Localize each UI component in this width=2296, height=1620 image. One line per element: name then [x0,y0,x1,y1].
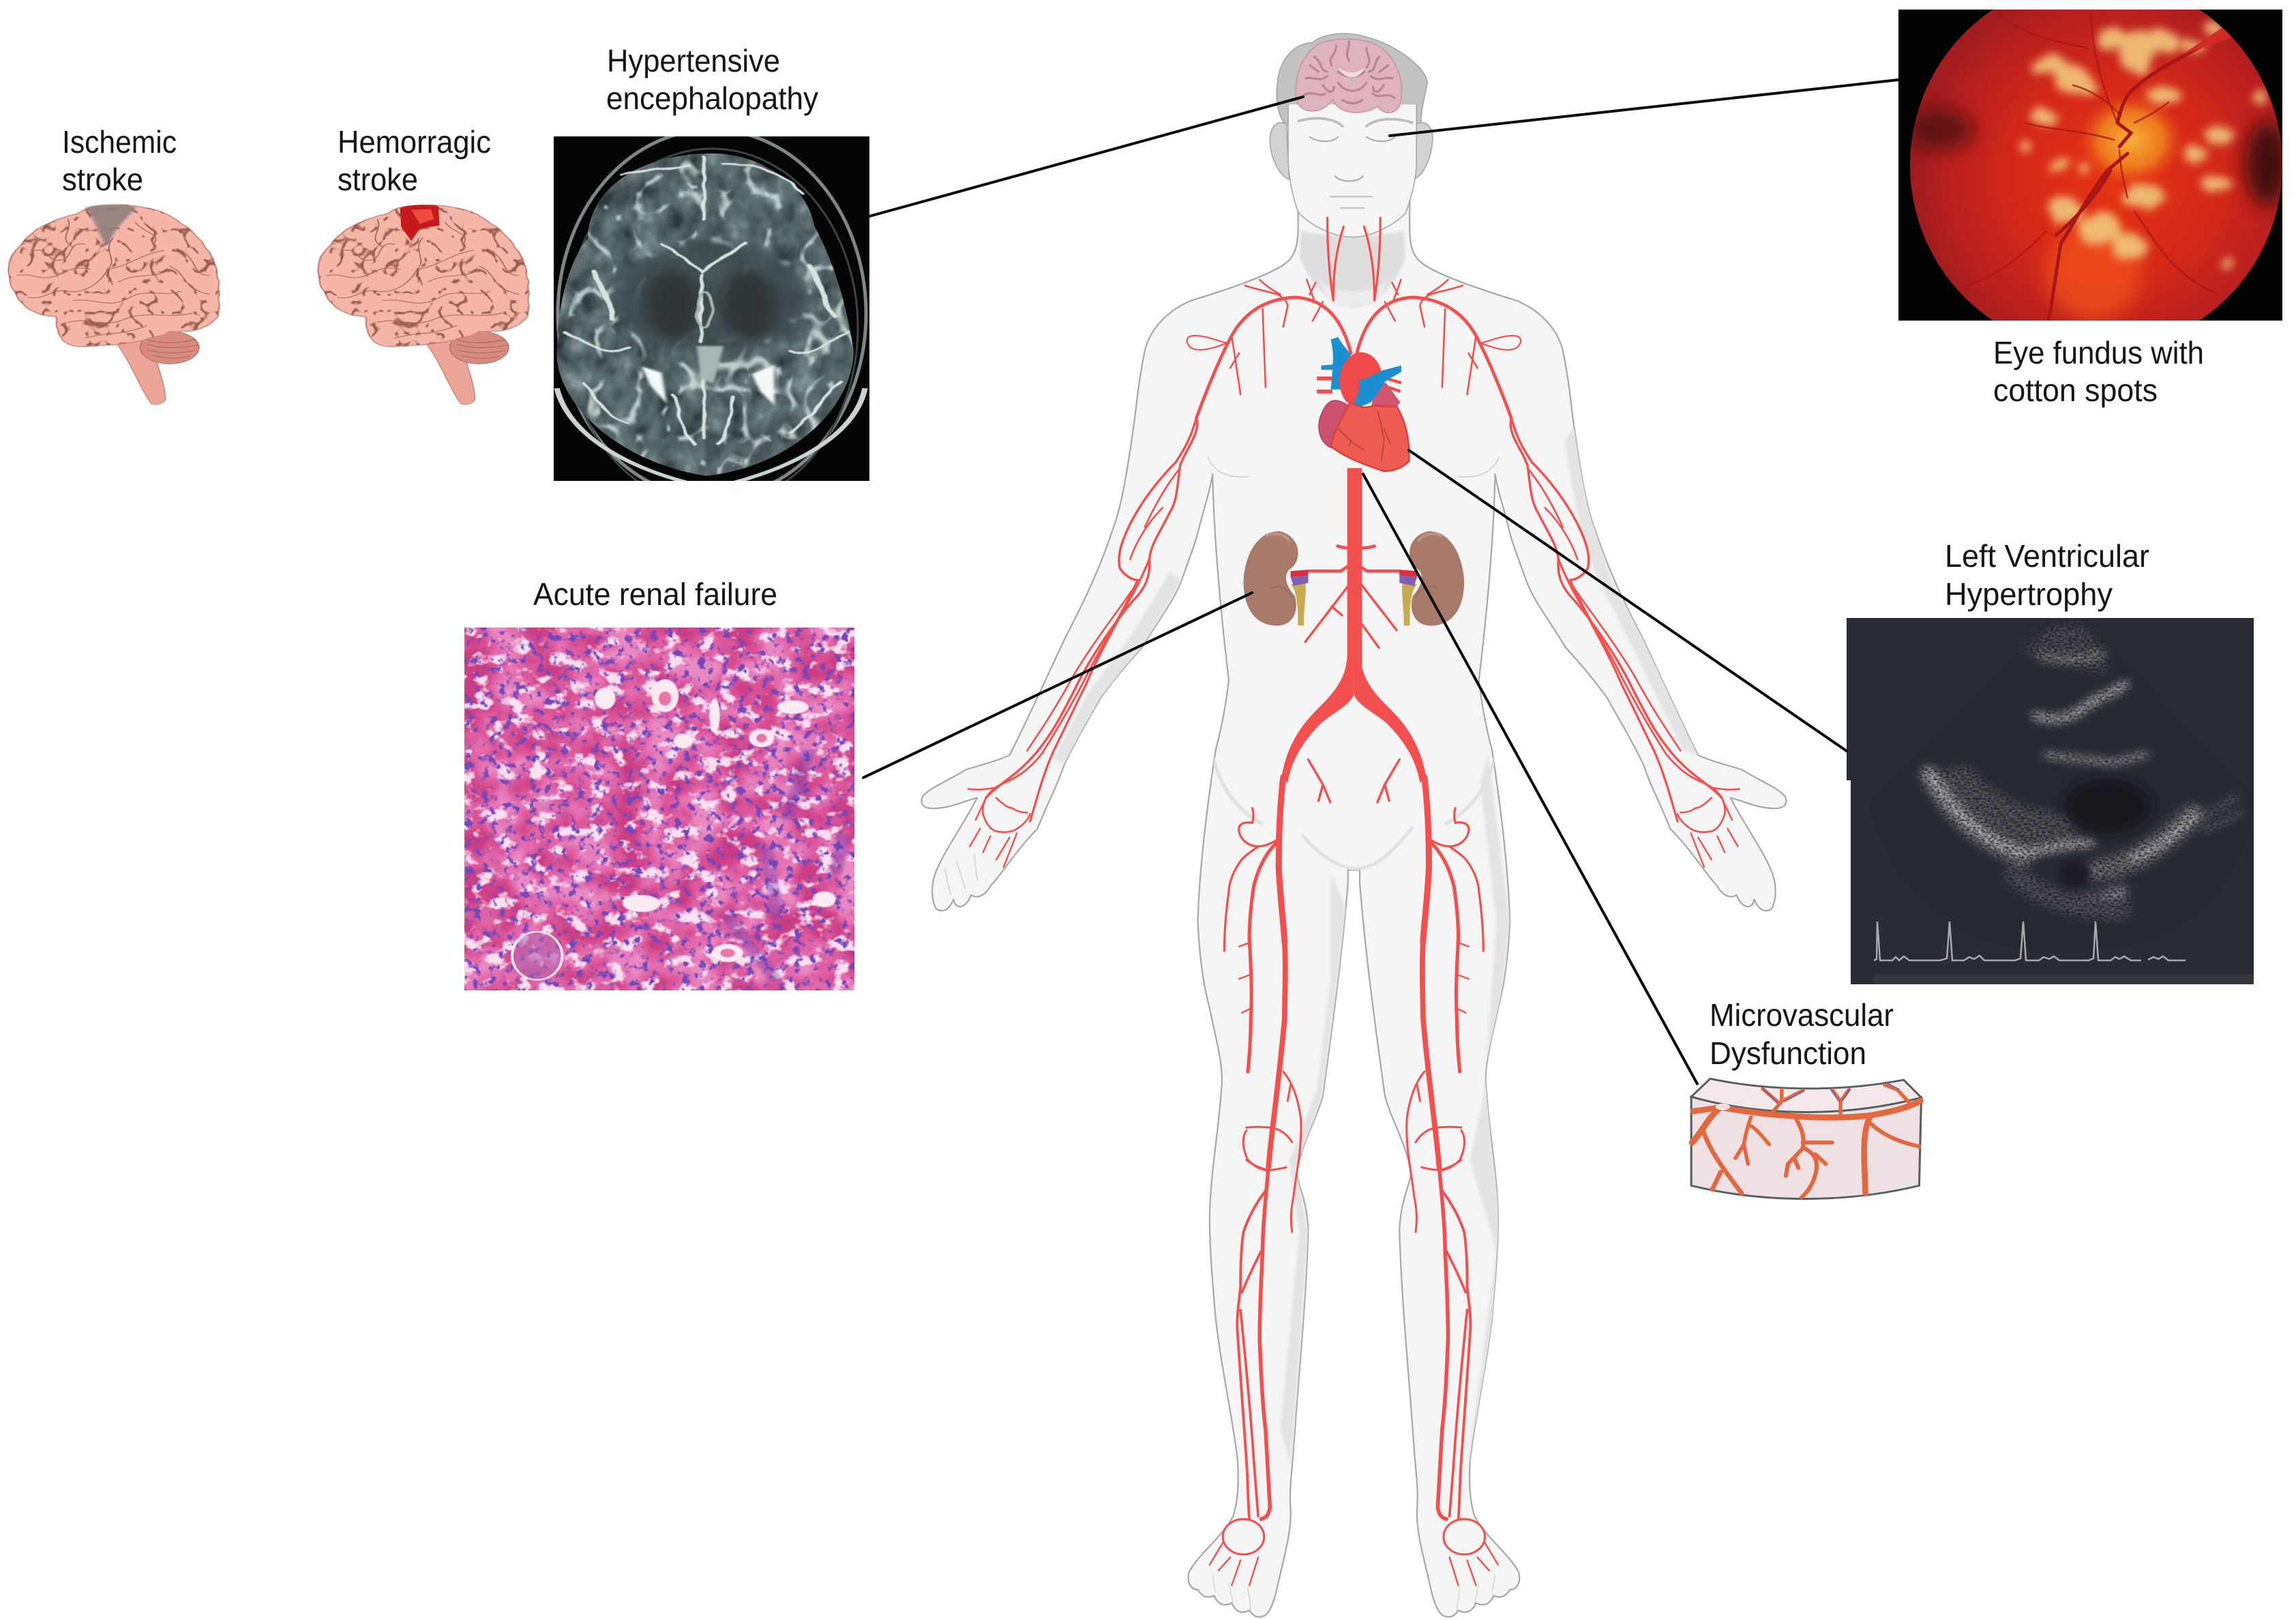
label: ischemic stroke [62,124,177,197]
label: eye fundus with cotton spots: Eye fundus with [1993,335,2204,370]
cotton wool spots [2016,20,2267,271]
label: left ventricular hypertrophy [1945,538,2149,612]
leader line: heart to echocardiogram [1409,450,1847,751]
label: eye fundus with cotton spots [1993,335,2204,408]
ECG trace [1874,922,2141,960]
panel: MRI brain scan [554,130,869,506]
brain in the head [1296,39,1401,113]
heart [1317,337,1409,471]
label: hypertensive encephalopathy: encephalopathy [606,80,818,116]
leader line: eye to fundus [1390,80,1898,136]
body silhouette [921,198,1786,1617]
kidneys [1244,531,1464,625]
label: ischemic stroke: Ischemic [62,124,177,160]
panel: echocardiogram [1847,614,2256,986]
label: microvascular dysfunction: Dysfunction [1710,1035,1866,1071]
leader line: aorta to microvascular [1363,474,1697,1084]
label: left ventricular hypertrophy: Hypertrophy [1945,576,2113,612]
label: acute renal failure: Acute renal failure [533,576,777,612]
hemorrhage area [400,205,440,241]
label: hemorrhagic stroke [338,124,491,197]
arteries [968,218,1740,1585]
label: ischemic stroke: stroke [62,162,143,197]
label: microvascular dysfunction [1710,997,1894,1071]
panel: hemorrhagic stroke brain [310,201,536,404]
label: hypertensive encephalopathy: Hypertensive [607,43,780,78]
label: hypertensive encephalopathy [606,43,818,116]
label: eye fundus with cotton spots: cotton spots [1993,372,2158,408]
ischemic area [85,205,136,246]
panel: microvascular dysfunction illustration [1691,1078,1922,1199]
vessels [1692,1082,1920,1197]
head, face and neck [1208,33,1499,477]
retinal vessels [1964,10,2223,321]
human body figure [921,33,1786,1617]
leader line: kidney to histology [863,593,1252,778]
label: hemorrhagic stroke: Hemorragic [338,124,491,160]
panel: ischemic stroke brain [0,201,226,404]
label: microvascular dysfunction: Microvascular [1710,997,1894,1033]
label: left ventricular hypertrophy: Left Ventricular [1945,538,2149,574]
panel: kidney histology [464,628,854,990]
panel: eye fundus photograph [1898,0,2291,334]
optic disc [2083,97,2179,181]
leader line: brain to MRI [869,97,1303,216]
label: hemorrhagic stroke: stroke [338,162,418,197]
